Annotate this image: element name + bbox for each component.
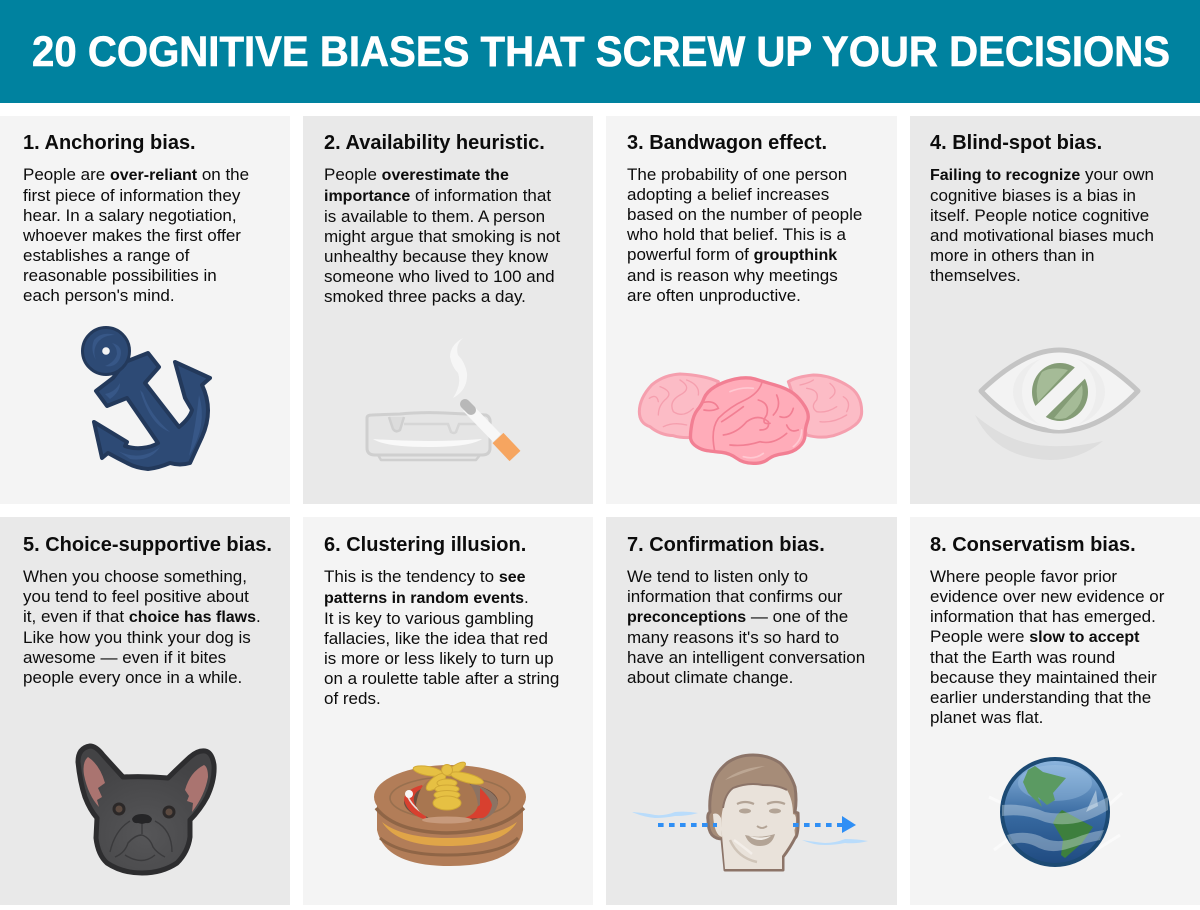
- text: bandwagon effect: [627, 165, 862, 305]
- text: bandwagon effect: and is reason why meetings: [627, 266, 838, 285]
- icon: head with arrow through ears: [632, 754, 868, 872]
- text: choice-supportive bias: you tend to feel positive about: [23, 587, 249, 606]
- panel: conservatism bias: [910, 517, 1200, 905]
- wave: right: [802, 839, 868, 845]
- text: confirmation bias: [627, 567, 865, 687]
- brain: centre: [690, 378, 808, 463]
- text: conservatism bias: because they maintained their: [930, 668, 1157, 687]
- panel: bandwagon effect: [606, 116, 897, 504]
- panel: choice-supportive bias: [0, 517, 290, 905]
- text: bandwagon effect: adopting a belief increases: [627, 185, 829, 204]
- text: anchoring bias: People are over-reliant on the: [23, 165, 249, 184]
- panel: availability heuristic: [303, 116, 593, 504]
- text: conservatism bias: People were slow to accept: [930, 627, 1139, 646]
- heading: conservatism bias: 8. Conservatism bias.: [930, 534, 1136, 556]
- heading: availability heuristic: 2. Availability heuristic.: [324, 132, 545, 154]
- icon: french bulldog: [76, 744, 217, 876]
- text: availability heuristic: People overestimate the: [324, 165, 509, 184]
- text: anchoring bias: establishes a range of: [23, 246, 189, 265]
- icon: eye with slashed iris: [976, 348, 1140, 460]
- text: clustering illusion: patterns in random events.: [324, 588, 529, 607]
- text: choice-supportive bias: awesome — even if it bites: [23, 648, 226, 667]
- text: clustering illusion: on a roulette table after a string: [324, 669, 559, 688]
- text: availability heuristic: might argue that smoking is not: [324, 227, 560, 246]
- text: blind-spot bias: itself. People notice cognitive: [930, 206, 1149, 225]
- icon: earth globe: [1000, 757, 1110, 867]
- brain: left: [639, 374, 718, 438]
- heading: confirmation bias: 7. Confirmation bias.: [627, 534, 825, 556]
- head: [708, 755, 798, 870]
- text: anchoring bias: reasonable possibilities in: [23, 266, 217, 285]
- text: conservatism bias: planet was flat.: [930, 708, 1043, 727]
- icon: ashtray and cigarette: [366, 339, 520, 462]
- icon: anchor: [81, 326, 212, 471]
- heading: clustering illusion: 6. Clustering illusion.: [324, 534, 526, 556]
- text: conservatism bias: information that has emerged.: [930, 607, 1156, 626]
- arrow: [658, 816, 856, 833]
- text: clustering illusion: of reds.: [324, 689, 381, 708]
- text: choice-supportive bias: Like how you think your dog is: [23, 628, 251, 647]
- text: choice-supportive bias: When you choose something,: [23, 567, 247, 586]
- text: confirmation bias: information that confirms our: [627, 587, 842, 606]
- text: confirmation bias: many reasons it's so hard to: [627, 628, 839, 647]
- text: bandwagon effect: who hold that belief. This is a: [627, 225, 846, 244]
- text: blind-spot bias: cognitive biases is a bias in: [930, 186, 1136, 205]
- header banner: [0, 0, 1200, 103]
- text: blind-spot bias: more in others than in: [930, 246, 1094, 265]
- text: anchoring bias: whoever makes the first offer: [23, 226, 241, 245]
- text: choice-supportive bias: people every once in a while.: [23, 668, 242, 687]
- text: anchoring bias: hear. In a salary negotiation,: [23, 206, 237, 225]
- heading: blind-spot bias: 4. Blind-spot bias.: [930, 132, 1102, 154]
- text: clustering illusion: [324, 567, 559, 708]
- icon: roulette wheel: [374, 762, 526, 866]
- icon: three brains: [638, 372, 864, 465]
- text: blind-spot bias: and motivational biases much: [930, 226, 1154, 245]
- panel: clustering illusion: [303, 517, 593, 905]
- heading: bandwagon effect: 3. Bandwagon effect.: [627, 132, 827, 154]
- text: choice-supportive bias: it, even if that choice has flaws.: [23, 607, 261, 626]
- text: conservatism bias: [930, 567, 1164, 727]
- text: clustering illusion: It is key to various gambling: [324, 609, 534, 628]
- text: availability heuristic: is available to them. A person: [324, 207, 545, 226]
- text: choice-supportive bias: [23, 567, 261, 687]
- text: conservatism bias: that the Earth was round: [930, 648, 1115, 667]
- heading: anchoring bias: 1. Anchoring bias.: [23, 132, 196, 154]
- text: clustering illusion: is more or less likely to turn up: [324, 649, 554, 668]
- brain: right: [788, 375, 862, 437]
- text: availability heuristic: [324, 165, 560, 306]
- text: confirmation bias: preconceptions — one of the: [627, 607, 848, 626]
- text: anchoring bias: first piece of information they: [23, 186, 240, 205]
- text: availability heuristic: someone who lived to 100 and: [324, 267, 555, 286]
- text: clustering illusion: This is the tendency to see: [324, 567, 526, 586]
- text: conservatism bias: Where people favor prior: [930, 567, 1117, 586]
- wave: left: [632, 812, 698, 818]
- text: blind-spot bias: [930, 165, 1154, 285]
- panel: anchoring bias: [0, 116, 290, 504]
- text: confirmation bias: about climate change.: [627, 668, 793, 687]
- text: availability heuristic: importance of information that: [324, 186, 551, 205]
- text: bandwagon effect: The probability of one person: [627, 165, 847, 184]
- panel: confirmation bias: [606, 517, 897, 905]
- text: anchoring bias: [23, 165, 249, 305]
- text: bandwagon effect: based on the number of people: [627, 205, 862, 224]
- text: availability heuristic: unhealthy because they know: [324, 247, 548, 266]
- text: blind-spot bias: themselves.: [930, 266, 1021, 285]
- heading: choice-supportive bias: 5. Choice-supportive bias.: [23, 534, 272, 556]
- text: confirmation bias: We tend to listen only to: [627, 567, 808, 586]
- text: clustering illusion: fallacies, like the idea that red: [324, 629, 548, 648]
- text: bandwagon effect: powerful form of groupthink: [627, 245, 837, 264]
- text: bandwagon effect: are often unproductive.: [627, 286, 801, 305]
- text: conservatism bias: earlier understanding that the: [930, 688, 1151, 707]
- panel: blind-spot bias: [910, 116, 1200, 504]
- text: confirmation bias: have an intelligent conversation: [627, 648, 865, 667]
- text: conservatism bias: evidence over new evidence or: [930, 587, 1164, 606]
- text: availability heuristic: smoked three packs a day.: [324, 287, 526, 306]
- text: blind-spot bias: Failing to recognize your own: [930, 165, 1154, 184]
- text: anchoring bias: each person's mind.: [23, 286, 175, 305]
